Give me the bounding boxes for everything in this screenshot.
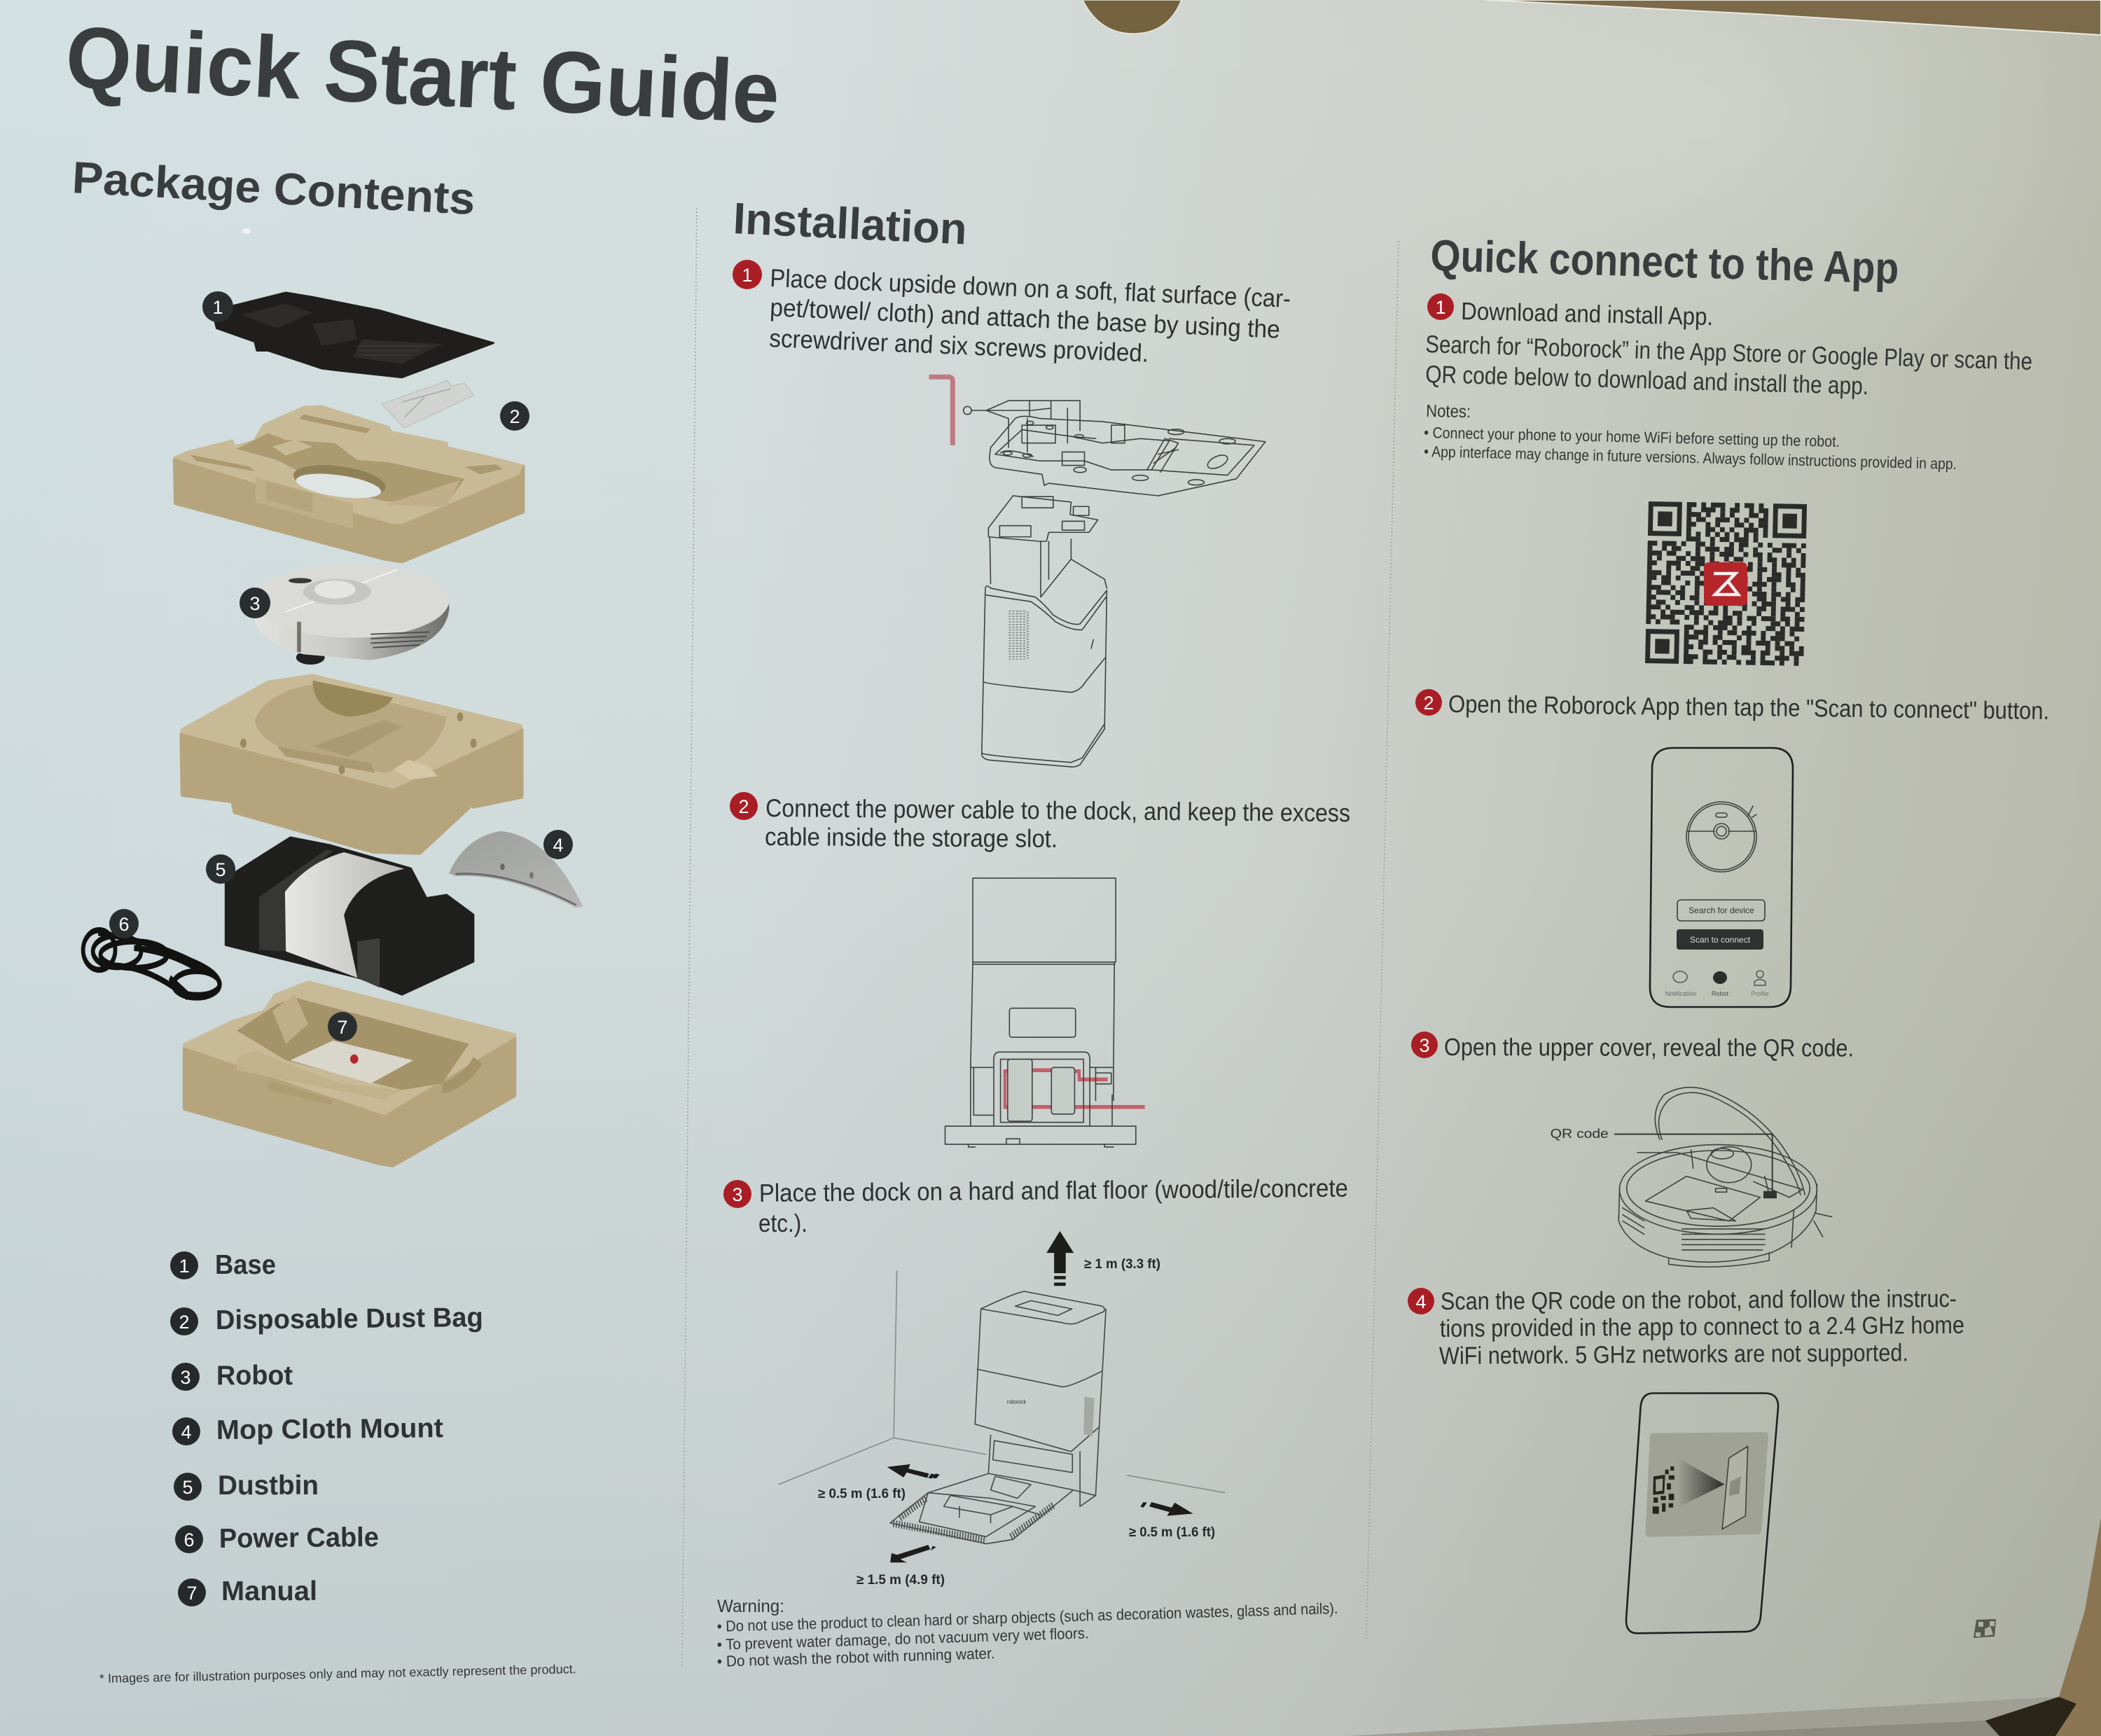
- legend: 4: [181, 1422, 192, 1443]
- number badges on illustration: 4: [553, 835, 564, 856]
- illustration: top tray: [175, 406, 522, 561]
- legend: Manual: [221, 1576, 317, 1606]
- legend: Disposable Dust Bag: [216, 1303, 483, 1335]
- legend: Dustbin: [218, 1471, 319, 1501]
- illustration: phone scanning QR code: [1626, 1393, 1778, 1633]
- legend: Power Cable: [219, 1522, 379, 1554]
- step 4 text: Scan the QR code on the robot, and follow the instruc-: [1441, 1285, 1957, 1315]
- app navigation tabs: Robot: [1712, 990, 1728, 997]
- warning text: • To prevent water damage, do not vacuum very wet floors.: [716, 1624, 1089, 1653]
- illustration: phone with app: [1650, 748, 1793, 1007]
- step 3 text: Open the upper cover, reveal the QR code.: [1444, 1034, 1854, 1062]
- number badges on illustration: 2: [509, 406, 520, 427]
- legend: 2: [179, 1312, 190, 1333]
- step 3 text: Place the dock on a hard and flat floor (wood/tile/concrete: [759, 1174, 1348, 1207]
- background: cardboard box behind paper: [1083, 0, 2101, 1736]
- warning text: • Do not wash the robot with running water.: [716, 1644, 995, 1670]
- legend: 6: [183, 1529, 195, 1550]
- step 1 text: screwdriver and six screws provided.: [769, 324, 1149, 368]
- dimension labels: ≥ 1.5 m (4.9 ft): [857, 1573, 945, 1588]
- heading: installation: Installation: [732, 194, 968, 254]
- step 3 text: etc.).: [758, 1209, 807, 1237]
- dimension labels: ≥ 0.5 m (1.6 ft): [818, 1487, 906, 1501]
- icon: tiny QR code: [1974, 1619, 1996, 1638]
- number badges on illustration: [109, 291, 573, 1041]
- illustration: bottom tray with manual: [184, 982, 515, 1165]
- icon: roborock logo on QR: [1704, 562, 1747, 606]
- legend: Robot: [216, 1361, 293, 1391]
- legend: [170, 1250, 483, 1606]
- number badges on illustration: 3: [249, 593, 261, 614]
- step 1 text: • App interface may change in future versions. Always follow instructions provided in app.: [1424, 443, 1957, 473]
- scan to connect button: Scan to connect: [1690, 935, 1751, 945]
- legend: 5: [182, 1477, 193, 1498]
- warning text: • Do not use the product to clean hard or sharp objects (such as decoration wastes, glass and nails).: [716, 1599, 1338, 1635]
- number badges on illustration: 5: [215, 859, 226, 880]
- dimension labels: ≥ 1 m (3.3 ft): [1084, 1257, 1160, 1272]
- robot icon in app: [1686, 802, 1756, 872]
- illustration: middle tray: [181, 676, 522, 852]
- vent grille: [1010, 611, 1028, 660]
- step 2 text: [730, 792, 1350, 853]
- number badges on illustration: 7: [337, 1017, 348, 1038]
- scan to connect button: [1677, 929, 1763, 950]
- step 2 text: 2: [738, 796, 749, 817]
- legend: Mop Cloth Mount: [216, 1413, 443, 1445]
- heading: quick connect: Quick connect to the App: [1430, 231, 1899, 293]
- step 3 text: 3: [1419, 1035, 1430, 1056]
- step 2 text: cable inside the storage slot.: [765, 822, 1058, 853]
- step 1 text: • Connect your phone to your home WiFi before setting up the robot.: [1424, 424, 1840, 450]
- app navigation tabs: [1665, 971, 1769, 997]
- legend: Base: [215, 1250, 276, 1280]
- illustration: dustbin: [226, 838, 473, 994]
- step 1 text: 1: [1435, 297, 1446, 318]
- dimension labels: [818, 1257, 1215, 1588]
- step 4 text: [1408, 1285, 1964, 1370]
- search for device button: [1677, 900, 1765, 921]
- step 1 text: Place dock upside down on a soft, flat surface (car-: [770, 263, 1291, 313]
- number badges on illustration: 6: [118, 914, 130, 935]
- illustration: disposable dust bag: [382, 380, 473, 428]
- legend: 3: [180, 1367, 191, 1388]
- illustration: mop cloth mount: [449, 831, 583, 908]
- QR code label: QR code: [1551, 1127, 1609, 1141]
- step 1 text: [733, 260, 1291, 368]
- dimension labels: ≥ 0.5 m (1.6 ft): [1129, 1525, 1215, 1540]
- search for device button: Search for device: [1689, 905, 1754, 915]
- illustration: dock placement: [890, 1291, 1106, 1544]
- step 1 text: [1424, 293, 2033, 473]
- step 3 text: [723, 1174, 1348, 1237]
- step 3 text: 3: [732, 1184, 743, 1205]
- QR code: [1645, 501, 1807, 666]
- step 4 text: 4: [1415, 1291, 1427, 1312]
- room lines: [779, 1270, 1225, 1493]
- step 1 text: pet/towel/ cloth) and attach the base by using the: [770, 293, 1281, 344]
- step 1 text: QR code below to download and install the app.: [1425, 361, 1869, 400]
- legend: 7: [186, 1583, 197, 1604]
- dotted column dividers: [682, 208, 1399, 1668]
- step 4 text: tions provided in the app to connect to a 2.4 GHz home: [1440, 1312, 1964, 1342]
- illustration: base in black: [214, 293, 494, 377]
- illustration: robot: [254, 564, 450, 665]
- step 1 text: Notes:: [1426, 401, 1471, 422]
- warning text: Warning:: [717, 1597, 784, 1616]
- illustration: dock front with cable: [945, 878, 1145, 1147]
- legend: 1: [179, 1256, 190, 1277]
- step 1 text: 1: [742, 265, 753, 286]
- illustration: power cable: [83, 930, 220, 998]
- footnote: * Images are for illustration purposes only and may not exactly represent the product.: [99, 1662, 576, 1686]
- app navigation tabs: Profile: [1751, 990, 1769, 997]
- step 4 text: WiFi network. 5 GHz networks are not supported.: [1439, 1339, 1908, 1370]
- title: Quick Start Guide: [64, 8, 782, 142]
- arrows: [887, 1231, 1193, 1562]
- step 2 text: Connect the power cable to the dock, and keep the excess: [765, 793, 1350, 827]
- app navigation tabs: Notification: [1665, 990, 1696, 997]
- warning text: [716, 1597, 1338, 1670]
- illustration: hex key: [929, 377, 952, 445]
- panel: quick connect to the app: [1408, 231, 2049, 1638]
- illustration: dock upside down with base plate: [964, 401, 1266, 767]
- panel: package contents: [71, 152, 583, 1686]
- heading: package contents: Package Contents: [71, 152, 476, 224]
- step 2 text: 2: [1423, 693, 1434, 714]
- brand mark: roborock: [1007, 1398, 1026, 1405]
- number badges on illustration: 1: [212, 297, 223, 318]
- step 1 text: Download and install App.: [1461, 298, 1714, 331]
- panel: installation: [716, 194, 1350, 1670]
- illustration: robot with open cover: [1551, 1088, 1831, 1267]
